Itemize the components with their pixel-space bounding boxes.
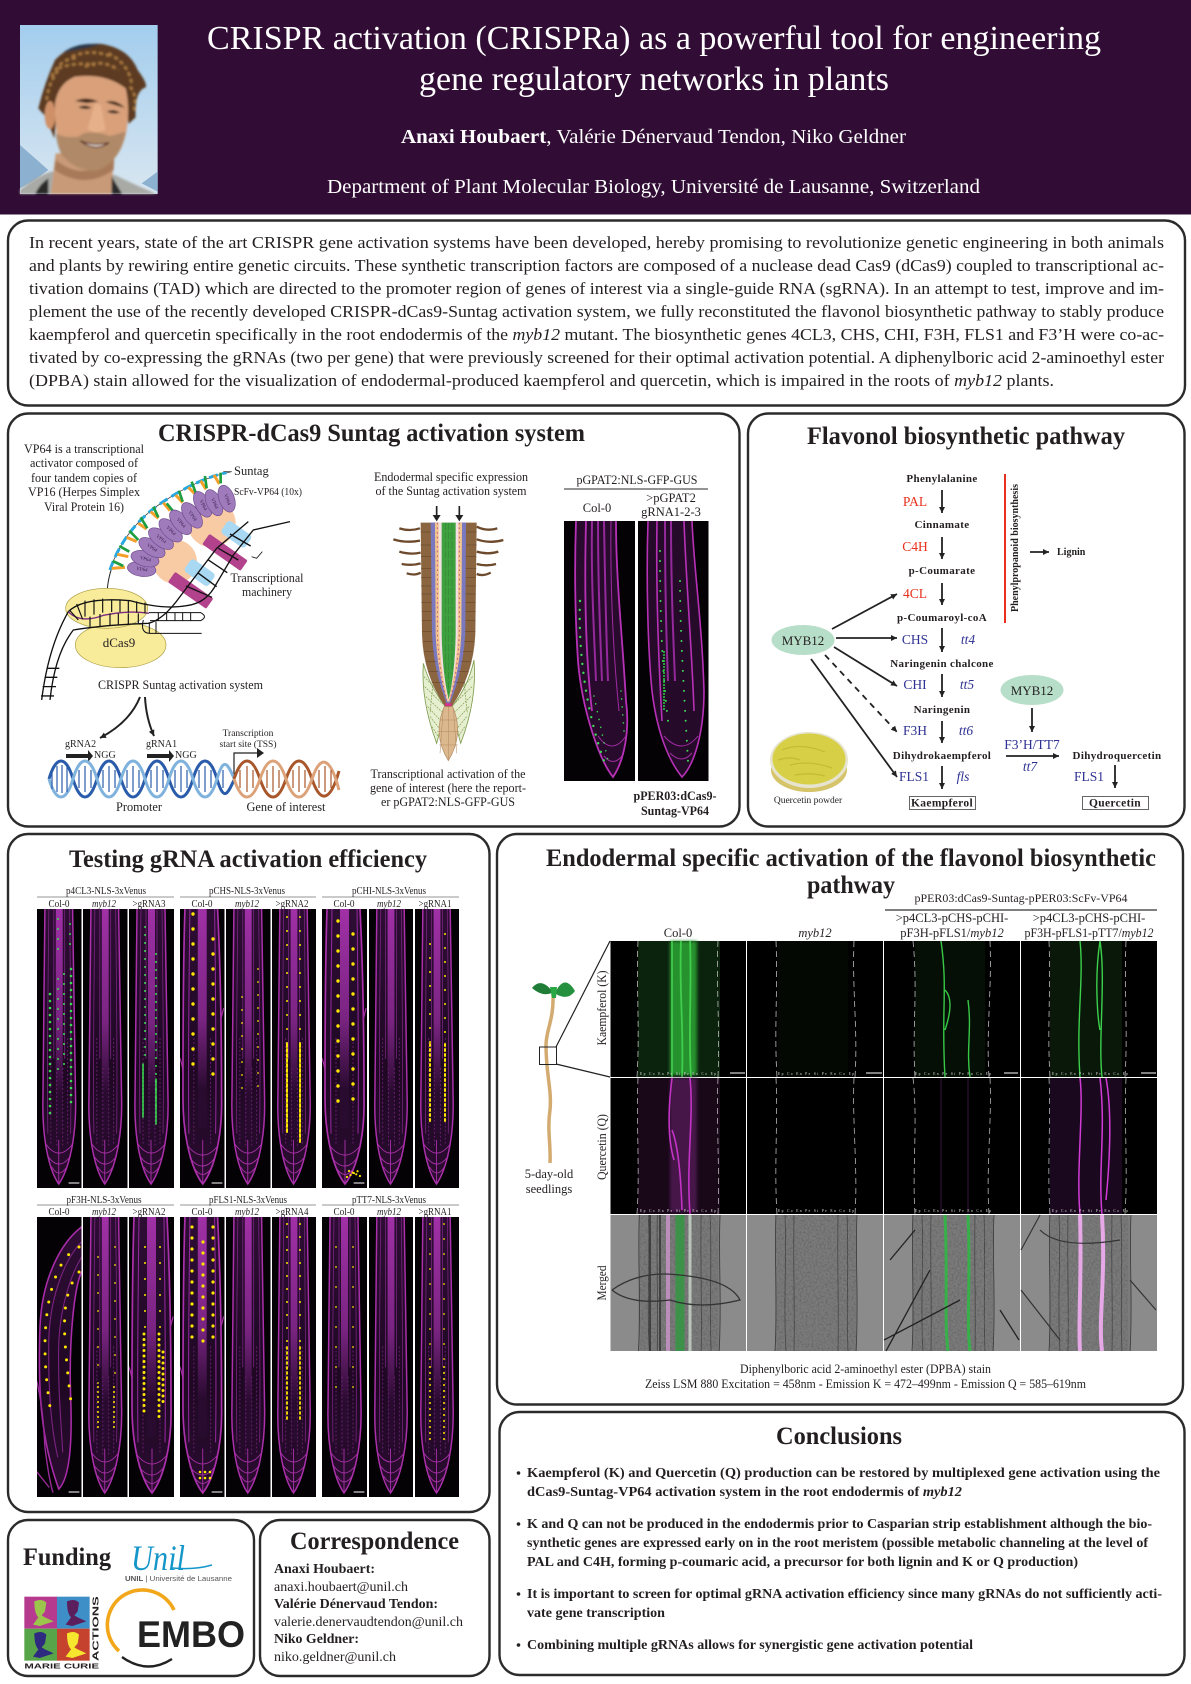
quercetin powder dish: Quercetin powder: [774, 796, 843, 806]
label: transcriptional machinery: Transcriptional: [230, 570, 304, 585]
bullet 2: synthetic genes are expressed early on in the root meristem (possible metabolic channeling at the level of: [527, 1535, 1149, 1550]
enzymes: tt6: [959, 723, 973, 738]
micrograph: gRNA reporter: [638, 521, 708, 781]
column headings row 2: >gRNA2: [132, 1207, 166, 1218]
construct header: >p4CL3-pCHS-pCHI-: [1033, 911, 1145, 925]
micrographs row 2: [37, 1217, 459, 1497]
column headings row 2: Col-0: [334, 1207, 354, 1218]
diagram: promoter DNA with gRNA sites: [49, 729, 339, 814]
enzymes: FLS1: [1074, 769, 1104, 784]
chart: pGPAT2 reporter images: Col-0: [583, 501, 611, 515]
panel: abstract: tivation domains (TAD) which are directed to the promoter region of genes of interest via a single-guide RNA (sgRNA). In an attempt to test, improve and im-: [29, 279, 1164, 298]
text: transcriptional activation caption: gene of interest (here the report-: [370, 781, 526, 795]
text: transcriptional activation caption: er pGPAT2:NLS-GFP-GUS: [381, 795, 515, 809]
text: endodermal specific expression: of the Suntag activation system: [376, 484, 527, 498]
panel: testing gRNA activation efficiency: [8, 834, 490, 1512]
column headings row 1: p4CL3-NLS-3xVenus: [66, 885, 146, 897]
column headings row 2: pFLS1-NLS-3xVenus: [209, 1194, 287, 1206]
micrographs: quercetin row: Ep Co En Pe St Pe En Co Ep: [1052, 1209, 1128, 1213]
column headings row 2: Col-0: [48, 1207, 70, 1218]
header band: [0, 0, 1191, 214]
logo: Marie Curie Actions: ACTIONS: [90, 1596, 100, 1661]
stain caption: Diphenylboric acid 2-aminoethyl ester (DPBA) stain: [740, 1362, 992, 1376]
micrographs: kaempferol row: Ep Co En Pe St Pe En Co Ep: [1052, 1072, 1128, 1076]
diagram: dCas9 Suntag complex: VP64: [209, 498, 219, 510]
column headings row 1: >gRNA1: [418, 899, 452, 910]
column headings row 1: Col-0: [48, 899, 70, 910]
micrographs: quercetin row: Ep Co En Pe St Pe En Co Ep: [915, 1209, 991, 1213]
contact list: [274, 1561, 463, 1664]
metabolites: Cinnamate: [914, 519, 970, 531]
heading: Flavonol biosynthetic pathway: [807, 423, 1125, 450]
enzymes: tt7: [1023, 759, 1038, 774]
construct header: Col-0: [664, 926, 692, 940]
diagram: dCas9 Suntag complex: [41, 472, 290, 700]
micrographs: quercetin row: Ep Co En Pe St Pe En Co Ep: [640, 1209, 716, 1213]
enzymes: fls: [957, 769, 969, 784]
panel: abstract: (DPBA) stain allowed for the visualization of endodermal-produced kaempferol and quercetin, which is impaired in the roots of myb12 plants.: [29, 371, 1054, 390]
column headings row 1: pCHI-NLS-3xVenus: [352, 885, 426, 897]
row labels: Kaempferol (K): [595, 970, 609, 1046]
label: transcriptional machinery: [230, 570, 304, 599]
VP64 note: VP16 (Herpes Simplex: [28, 485, 141, 499]
contact list: niko.geldner@unil.ch: [274, 1649, 396, 1664]
logo: Unil: UNIL | Université de Lausanne: [125, 1574, 232, 1583]
diagram: promoter DNA with gRNA sites: Transcription: [223, 729, 274, 739]
enzymes: CHI: [903, 677, 927, 692]
MYB12 second regulator: MYB12: [1011, 683, 1053, 698]
phenylpropanoid bracket: Lignin: [1057, 547, 1086, 558]
row labels: Merged: [595, 1265, 609, 1300]
label: Suntag: Suntag: [234, 464, 269, 478]
metabolites: Naringenin: [914, 704, 970, 716]
VP64 note: four tandem copies of: [31, 471, 138, 485]
enzymes: F3H: [903, 723, 927, 738]
diagram: dCas9 Suntag complex: VP64: [198, 499, 208, 512]
bullet 4: Combining multiple gRNAs allows for synergistic gene activation potential: [527, 1637, 973, 1652]
heading: Endodermal specific activation of the flavonol biosynthetic: [546, 845, 1156, 872]
column headings row 2: myb12: [377, 1207, 402, 1218]
Kaempferol box: Kaempferol: [911, 798, 973, 810]
column headings row 1: myb12: [235, 899, 260, 910]
text: endodermal specific expression: [374, 470, 529, 498]
heading: Funding: [23, 1544, 111, 1571]
construct header: [664, 891, 1157, 940]
construct header: pF3H-pFLS1-pTT7/myb12: [1024, 926, 1154, 940]
title: CRISPR activation (CRISPRa) as a powerful tool for engineering: [207, 20, 1101, 57]
diagram: dCas9 Suntag complex: VP64: [136, 567, 148, 573]
panel: abstract: and plants by rewiring entire genetic circuits. These synthetic transcription factors are composed of a nuclease dead Cas9 (dCas9) coupled to transcriptional ac-: [29, 256, 1164, 275]
label: transcriptional machinery: machinery: [242, 584, 292, 599]
bullet 2: PAL and C4H, forming p-coumaric acid, a precursor for both lignin and K or Q production): [527, 1554, 1078, 1569]
label: ScFv-VP64: ScFv-VP64 (10x): [234, 487, 302, 498]
label: pPER03 construct: pPER03:dCas9-: [634, 788, 716, 803]
seedling illustration: 5-day-old: [525, 1167, 574, 1181]
diagram: promoter DNA with gRNA sites: Gene of interest: [246, 799, 326, 814]
metabolites: [890, 473, 1161, 762]
enzymes: F3’H/TT7: [1004, 737, 1060, 752]
stain caption: Zeiss LSM 880 Excitation = 458nm - Emission K = 472–499nm - Emission Q = 585–619nm: [645, 1377, 1086, 1391]
bullet 3: It is important to screen for optimal gRNA activation efficiency since many gRNAs do not sufficiently acti-: [527, 1586, 1162, 1601]
construct header: pF3H-pFLS1/myb12: [900, 926, 1004, 940]
construct header: pPER03:dCas9-Suntag-pPER03:ScFv-VP64: [914, 891, 1128, 905]
column headings row 2: >gRNA1: [418, 1207, 452, 1218]
metabolites: Dihydroquercetin: [1073, 750, 1161, 762]
enzymes: C4H: [902, 539, 928, 554]
chart: pGPAT2 reporter images: >pGPAT2: [646, 491, 696, 505]
bullet 2: K and Q can not be produced in the endodermis prior to Casparian strip establishment although the bio-: [527, 1516, 1152, 1531]
contact list: anaxi.houbaert@unil.ch: [274, 1579, 408, 1594]
column headings row 1: myb12: [92, 899, 117, 910]
DNA helix: promoter: [49, 761, 234, 797]
column headings row 2: >gRNA4: [276, 1207, 309, 1218]
chart: pGPAT2 reporter images: pGPAT2:NLS-GFP-GUS: [576, 473, 698, 487]
bullet 3: [517, 1586, 1162, 1620]
panel: correspondence: [260, 1520, 490, 1676]
enzymes: CHS: [902, 632, 928, 647]
panel: funding: [8, 1520, 254, 1676]
column headings row 1: myb12: [377, 899, 402, 910]
chart: pGPAT2 reporter images: [564, 473, 708, 781]
bullet 1: Kaempferol (K) and Quercetin (Q) production can be restored by multiplexed gene activation using the: [527, 1465, 1160, 1480]
panel: CRISPR-dCas9 Suntag activation system: [8, 414, 740, 826]
diagram: promoter DNA with gRNA sites: NGG: [94, 750, 116, 761]
micrographs: kaempferol row: Ep Co En Pe St Pe En Co Ep: [778, 1072, 854, 1076]
VP64 note: activator composed of: [30, 456, 139, 470]
DNA helix: gene of interest: [234, 761, 339, 797]
metabolites: Phenylalanine: [906, 473, 978, 485]
panel: abstract: kaempferol and quercetin specifically in the root endodermis of the myb12 mutant. The biosynthetic genes 4CL3, CHS, CHI, F3H, FLS1 and F3’H were co-ac-: [29, 325, 1164, 344]
column headings row 2: [48, 1194, 452, 1218]
contact list: Valérie Dénervaud Tendon:: [274, 1596, 438, 1611]
column headings row 1: Col-0: [192, 899, 212, 910]
heading: Testing gRNA activation efficiency: [69, 846, 427, 873]
logo: EMBO: [107, 1590, 245, 1667]
metabolites: Dihydrokaempferol: [893, 750, 991, 762]
bullet 3: vate gene transcription: [527, 1605, 666, 1620]
MYB12 second regulator: [1000, 675, 1064, 705]
diagram: dCas9 Suntag complex: VP64: [186, 510, 197, 523]
contact list: valerie.denervaudtendon@unil.ch: [274, 1614, 463, 1629]
enzymes: 4CL: [903, 586, 927, 601]
MYB12 regulator: MYB12: [782, 633, 824, 648]
panel: endodermal specific activation: [497, 834, 1183, 1404]
panel: abstract: tivated by co-expressing the gRNAs (two per gene) that were previously screened for their optimal activation potential. A diphenylboric acid 2-aminoethyl ester: [29, 348, 1165, 367]
enzymes: tt4: [961, 632, 975, 647]
heading: pathway: [807, 872, 895, 899]
contact list: Niko Geldner:: [274, 1631, 359, 1646]
metabolites: p-Coumarate: [909, 565, 975, 577]
VP64 note: Viral Protein 16): [44, 500, 124, 514]
panel: conclusions: [500, 1412, 1184, 1675]
diagram: root cross-section: [393, 506, 503, 761]
panel: flavonol biosynthetic pathway: [748, 414, 1184, 826]
diagram: dCas9 Suntag complex: VP64: [145, 543, 158, 554]
diagram: dCas9 Suntag complex: VP64: [165, 526, 176, 537]
phenylpropanoid bracket: Phenylpropanoid biosynthesis: [1010, 484, 1021, 612]
logo: Unil: [125, 1538, 232, 1583]
panel: abstract: [8, 220, 1185, 406]
label: pPER03 construct: [634, 788, 716, 818]
micrographs: quercetin row: [610, 1078, 1157, 1214]
arrows to gRNA sites: [100, 697, 154, 738]
stain caption: [645, 1362, 1086, 1391]
column headings row 2: pTT7-NLS-3xVenus: [352, 1194, 426, 1206]
logo: Marie Curie Actions: [24, 1596, 100, 1671]
MYB12 regulator: [772, 594, 897, 777]
diagram: promoter DNA with gRNA sites: gRNA2: [65, 739, 96, 750]
metabolites: Naringenin chalcone: [890, 658, 994, 670]
VP64 note: [24, 442, 144, 514]
metabolites: p-Coumaroyl-coA: [897, 612, 987, 624]
logo: Marie Curie Actions: MARIE CURIE: [24, 1662, 99, 1671]
chart: pGPAT2 reporter images: gRNA1-2-3: [641, 505, 701, 519]
heading: Conclusions: [776, 1423, 902, 1450]
text: transcriptional activation caption: [370, 767, 526, 809]
column headings row 1: >gRNA3: [132, 899, 166, 910]
quercetin powder dish: [770, 732, 848, 806]
construct header: >p4CL3-pCHS-pCHI-: [896, 911, 1008, 925]
enzymes: PAL: [903, 494, 927, 509]
column headings row 1: Col-0: [334, 899, 354, 910]
text: transcriptional activation caption: Transcriptional activation of the: [370, 767, 526, 781]
column headings row 1: pCHS-NLS-3xVenus: [209, 885, 285, 897]
pathway arrows: [942, 490, 1115, 789]
enzymes: FLS1: [899, 769, 929, 784]
micrographs: kaempferol row: Ep Co En Pe St Pe En Co Ep: [640, 1072, 716, 1076]
row labels: [595, 970, 609, 1300]
authors: Anaxi Houbaert , Valérie Dénervaud Tendon, Niko Geldner: [401, 127, 907, 148]
Quercetin box: Quercetin: [1089, 798, 1141, 810]
title: [207, 20, 1101, 98]
label: CRISPR Suntag activation system: CRISPR Suntag activation system: [98, 678, 263, 692]
seedling illustration: seedlings: [526, 1182, 572, 1196]
diagram: dCas9 Suntag complex: VP64: [155, 534, 167, 545]
micrographs: quercetin row: Ep Co En Pe St Pe En Co Ep: [778, 1209, 854, 1213]
portrait photo: [20, 25, 158, 194]
heading: CRISPR-dCas9 Suntag activation system: [158, 420, 585, 447]
enzymes: tt5: [960, 677, 974, 692]
column headings row 2: pF3H-NLS-3xVenus: [66, 1194, 142, 1206]
contact list: Anaxi Houbaert:: [274, 1561, 375, 1576]
column headings row 2: myb12: [235, 1207, 260, 1218]
bullet 1: dCas9-Suntag-VP64 activation system in the root endodermis of myb12: [527, 1484, 962, 1499]
affiliation: Department of Plant Molecular Biology, Université de Lausanne, Switzerland: [327, 177, 980, 198]
diagram: promoter DNA with gRNA sites: NGG: [175, 750, 197, 761]
text: endodermal specific expression: Endodermal specific expression: [374, 470, 529, 484]
bullet 2: [517, 1516, 1152, 1569]
phenylpropanoid bracket: [1005, 474, 1086, 623]
enzymes: [899, 494, 1104, 784]
micrographs: kaempferol row: Ep Co En Pe St Pe En Co Ep: [915, 1072, 991, 1076]
diagram: promoter DNA with gRNA sites: start site (TSS): [220, 739, 276, 750]
column headings row 2: Col-0: [192, 1207, 212, 1218]
title: gene regulatory networks in plants: [419, 61, 889, 98]
label: pPER03 construct: Suntag-VP64: [641, 803, 709, 818]
diagram: dCas9 Suntag complex: VP64: [139, 556, 152, 564]
label: dCas9: dCas9: [103, 635, 135, 650]
diagram: promoter DNA with gRNA sites: gRNA1: [146, 739, 177, 750]
panel: abstract: plement the use of the recently developed CRISPR-dCas9-Suntag activation system, we fully reconstituted the flavonol biosynthetic pathway to stably produce: [29, 302, 1164, 321]
panel: abstract: In recent years, state of the art CRISPR gene activation systems have been developed, hereby promising to revolutionize genetic engineering in both animals: [29, 233, 1164, 252]
logo: EMBO: EMBO: [137, 1614, 245, 1655]
heading: [546, 845, 1156, 899]
diagram: promoter DNA with gRNA sites: Promoter: [116, 799, 163, 814]
micrograph: Col-0 reporter: [564, 521, 635, 781]
micrographs row 1: [37, 909, 459, 1188]
column headings row 1: >gRNA2: [276, 899, 308, 910]
diagram: dCas9 Suntag complex: VP64: [175, 517, 186, 530]
column headings row 2: myb12: [92, 1207, 117, 1218]
column headings row 1: [37, 885, 459, 1205]
micrographs: merged row: [610, 1215, 1157, 1351]
logo: Unil: Unil: [131, 1538, 185, 1578]
bullet 1: [517, 1465, 1160, 1499]
seedling illustration: [525, 941, 610, 1196]
VP64 note: VP64 is a transcriptional: [24, 442, 144, 456]
construct header: myb12: [798, 926, 832, 940]
diagram: dCas9 Suntag complex: VP64: [222, 494, 231, 506]
micrographs: kaempferol row: [610, 941, 1157, 1077]
row labels: Quercetin (Q): [595, 1114, 609, 1180]
heading: Correspondence: [290, 1528, 459, 1555]
